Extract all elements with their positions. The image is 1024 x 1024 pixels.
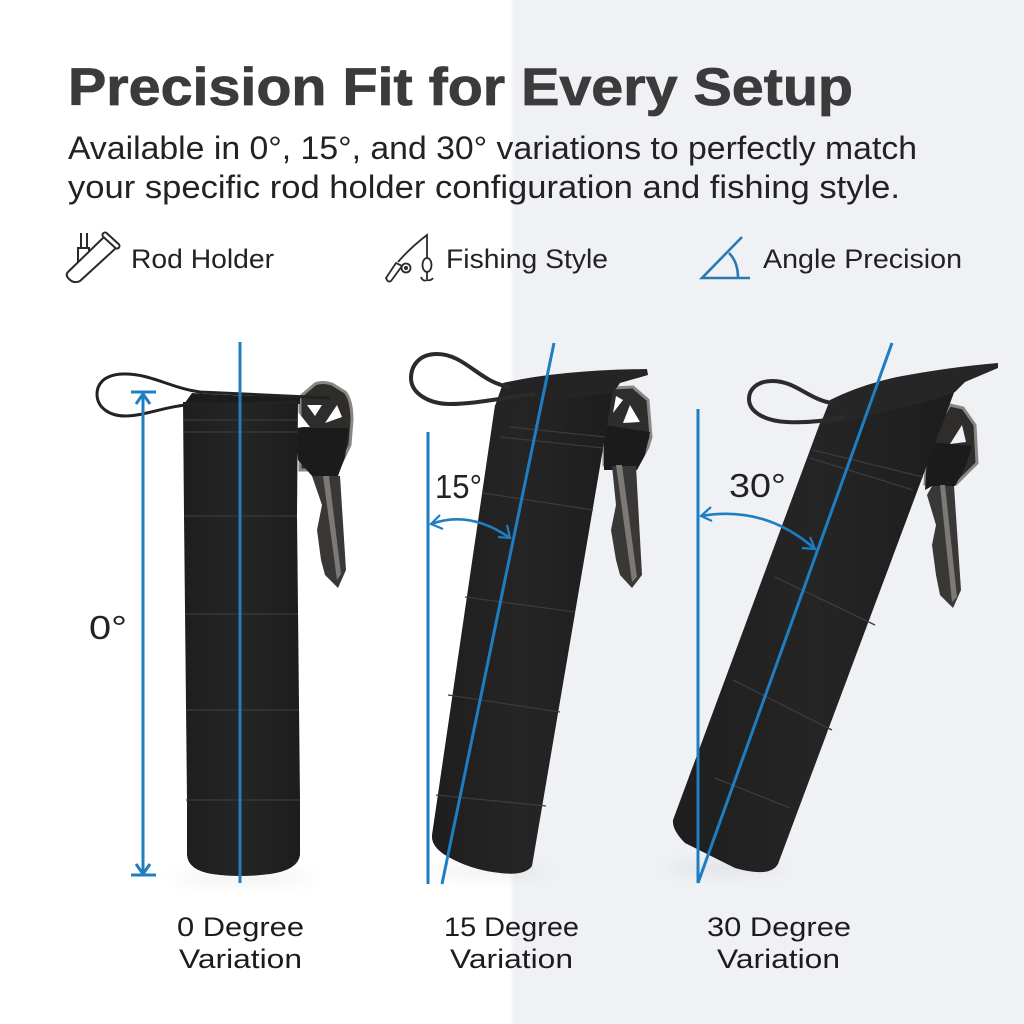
angle label 0: 0° bbox=[89, 609, 127, 646]
caption: 0 degree variation bbox=[177, 912, 304, 974]
subtitle: your specific rod holder configuration and fishing style. bbox=[68, 169, 900, 205]
icon: fishing rod bbox=[386, 235, 433, 282]
product: 0 degree holder bbox=[97, 374, 352, 883]
label: rod holder: Rod Holder bbox=[131, 244, 274, 274]
measurement: 30 degree axes and arc bbox=[698, 343, 892, 883]
icon: angle bbox=[702, 237, 750, 278]
caption: 15 degree variation: Variation bbox=[450, 944, 573, 974]
caption: 0 degree variation: 0 Degree bbox=[177, 912, 304, 942]
caption: 15 degree variation: 15 Degree bbox=[444, 912, 579, 942]
product: 15 degree holder bbox=[411, 354, 651, 877]
caption: 30 degree variation bbox=[707, 912, 851, 974]
caption: 30 degree variation: 30 Degree bbox=[707, 912, 851, 942]
measurement: 0 degree axis and height arrow bbox=[131, 342, 240, 883]
product: 30 degree holder bbox=[665, 363, 998, 873]
measurement: 15 degree axes and arc bbox=[428, 343, 554, 884]
label: angle precision: Angle Precision bbox=[763, 244, 962, 274]
subtitle: Available in 0°, 15°, and 30° variations to perfectly match bbox=[68, 130, 917, 166]
angle label 15: 15° bbox=[435, 468, 482, 505]
title: Precision Fit for Every Setup bbox=[68, 58, 853, 117]
label: fishing style: Fishing Style bbox=[446, 244, 608, 274]
caption: 30 degree variation: Variation bbox=[717, 944, 840, 974]
icon: rod holder bbox=[67, 233, 117, 282]
angle label 30: 30° bbox=[729, 467, 786, 504]
subtitle bbox=[68, 130, 917, 205]
caption: 15 degree variation bbox=[444, 912, 579, 974]
caption: 0 degree variation: Variation bbox=[179, 944, 302, 974]
